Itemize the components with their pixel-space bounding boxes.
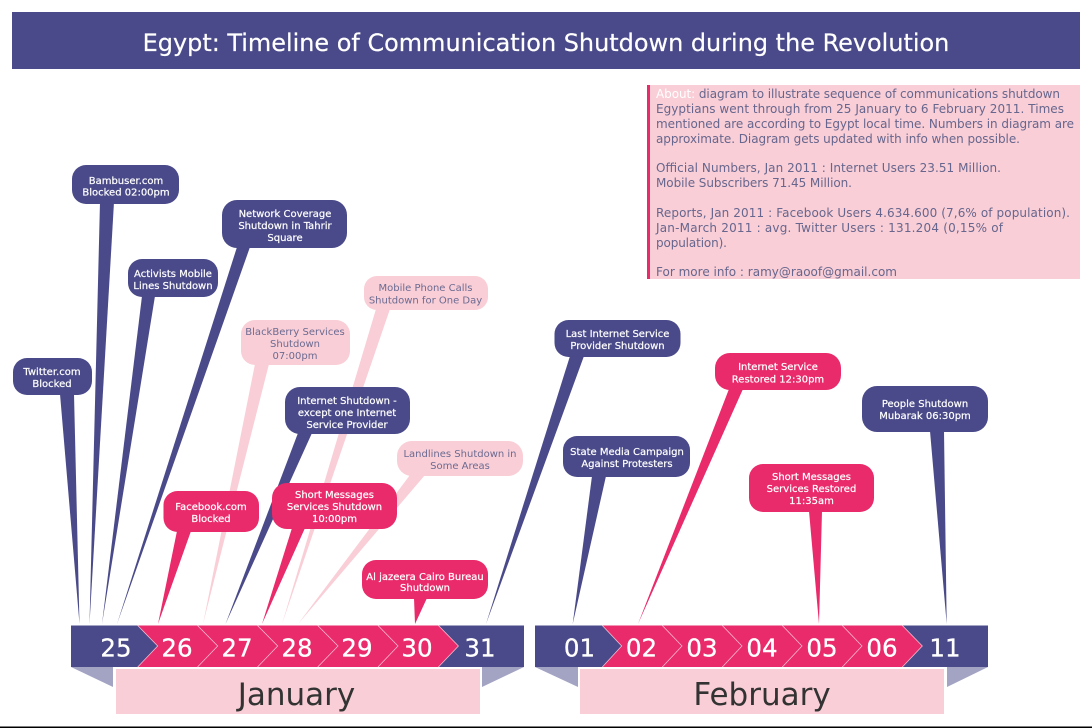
callout: short messages shutdown: Short Messages — [295, 490, 374, 501]
title banner — [12, 12, 1080, 69]
callout: internet service restored: Restored 12:30pm — [732, 374, 824, 386]
callout: short messages restored: Short Messages — [772, 472, 851, 483]
callout: landlines shutdown: Landlines Shutdown in — [403, 449, 517, 460]
callout: facebook blocked — [158, 491, 259, 624]
callout: twitter blocked: Blocked — [32, 379, 72, 390]
callout: short messages restored: Services Restored — [767, 484, 856, 495]
callout: people shutdown mubarak — [862, 386, 988, 624]
panel: about: Reports, Jan 2011 : Facebook Users 4.634.600 (7,6% of population). — [656, 206, 1070, 220]
callout: mobile phone calls shutdown: Mobile Phone Calls — [378, 283, 473, 294]
title banner: Egypt: Timeline of Communication Shutdown during the Revolution — [143, 29, 949, 57]
callout: activists mobile lines — [102, 259, 218, 624]
panel: about: Jan-March 2011 : avg. Twitter Users : 131.204 (0,15% of — [655, 221, 1004, 235]
timeline: february: 01 — [564, 634, 595, 662]
callout: last internet provider — [486, 320, 680, 624]
callout: state media campaign: State Media Campaign — [570, 447, 684, 458]
callout: short messages shutdown: 10:00pm — [312, 514, 357, 525]
callout: internet service restored — [638, 353, 841, 624]
callout: al jazeera bureau — [362, 560, 488, 624]
callout: blackberry services shutdown: BlackBerry Services — [245, 327, 345, 338]
panel: about: Official Numbers, Jan 2011 : Internet Users 23.51 Million. — [656, 161, 1001, 175]
month label: january — [116, 669, 480, 714]
callout: internet shutdown: Service Provider — [306, 420, 389, 431]
panel: about — [647, 85, 1080, 279]
callout: blackberry services shutdown: Shutdown — [270, 339, 320, 350]
month label: february: February — [693, 677, 831, 713]
callout: internet shutdown: except one Internet — [298, 408, 396, 419]
callout: network coverage tahrir — [117, 200, 347, 624]
timeline: february: 03 — [686, 634, 718, 662]
callout: bambuser blocked: Bambuser.com — [89, 176, 163, 187]
callout: blackberry services shutdown — [203, 320, 350, 624]
callout: twitter blocked: Twitter.com — [22, 367, 81, 378]
callout: twitter blocked — [13, 358, 92, 624]
callout: state media campaign — [563, 436, 690, 624]
month label: january: January — [236, 677, 355, 713]
callout: activists mobile lines: Lines Shutdown — [133, 281, 213, 292]
callout: blackberry services shutdown: 07:00pm — [273, 351, 317, 362]
callout: facebook blocked: Facebook.com — [175, 502, 247, 513]
callout: activists mobile lines: Activists Mobile — [134, 269, 212, 280]
timeline: january: 29 — [341, 634, 373, 662]
panel: about: population). — [656, 236, 727, 250]
callout: internet shutdown: Internet Shutdown - — [297, 396, 397, 407]
callout: mobile phone calls shutdown — [282, 276, 488, 624]
callout: short messages shutdown: Services Shutdown — [287, 502, 382, 513]
callout: al jazeera bureau: Shutdown — [400, 583, 450, 594]
timeline: february: 11 — [929, 634, 961, 662]
callout: state media campaign: Against Protesters — [581, 459, 673, 470]
callout: internet shutdown — [226, 387, 410, 624]
timeline: january: 28 — [281, 634, 313, 662]
callout: people shutdown mubarak: Mubarak 06:30pm — [879, 411, 971, 422]
callout: landlines shutdown: Some Areas — [430, 461, 490, 472]
callout: al jazeera bureau: Al jazeera Cairo Bureau — [366, 572, 484, 583]
panel: about: Egyptians went through from 25 January to 6 February 2011. Times — [656, 102, 1064, 116]
callout: bambuser blocked — [72, 165, 179, 624]
timeline: february: 04 — [746, 634, 778, 662]
callout: last internet provider: Last Internet Service — [566, 329, 669, 340]
callout: landlines shutdown — [298, 441, 523, 624]
timeline: february: 06 — [866, 634, 898, 662]
timeline: january: 26 — [161, 634, 193, 662]
panel: about: For more info : ramy@raoof@gmail.com — [656, 265, 897, 279]
callout: last internet provider: Provider Shutdown — [570, 341, 665, 352]
callout: internet service restored: Internet Service — [738, 362, 818, 373]
timeline: january: 27 — [221, 634, 253, 662]
timeline: january: 31 — [464, 634, 496, 662]
callout: people shutdown mubarak: People Shutdown — [882, 399, 968, 410]
callout: short messages shutdown — [262, 483, 397, 624]
callout: facebook blocked: Blocked — [191, 514, 231, 525]
timeline: february: 02 — [626, 634, 657, 662]
callout: mobile phone calls shutdown: Shutdown for One Day — [369, 296, 482, 306]
timeline: january: 25 — [100, 634, 132, 662]
callout: short messages restored: 11:35am — [789, 496, 834, 507]
month label: february — [580, 669, 944, 714]
timeline: february: 05 — [806, 634, 838, 662]
callout: network coverage tahrir: Square — [267, 233, 303, 244]
callout: short messages restored — [749, 464, 874, 624]
panel: about: Mobile Subscribers 71.45 Million. — [656, 176, 852, 190]
callout: network coverage tahrir: Shutdown in Tahrir — [238, 221, 333, 232]
callout: bambuser blocked: Blocked 02:00pm — [82, 188, 170, 198]
timeline: january — [71, 626, 524, 714]
callout: network coverage tahrir: Network Coverage — [239, 209, 331, 220]
panel: about: mentioned are according to Egypt local time. Numbers in diagram are — [656, 117, 1074, 131]
panel: about: approximate. Diagram gets updated with info when possible. — [656, 132, 1020, 146]
panel: about: About: diagram to illustrate sequence of communications shutdown — [656, 87, 1060, 101]
timeline: january: 30 — [401, 634, 433, 662]
timeline: february — [535, 626, 988, 714]
